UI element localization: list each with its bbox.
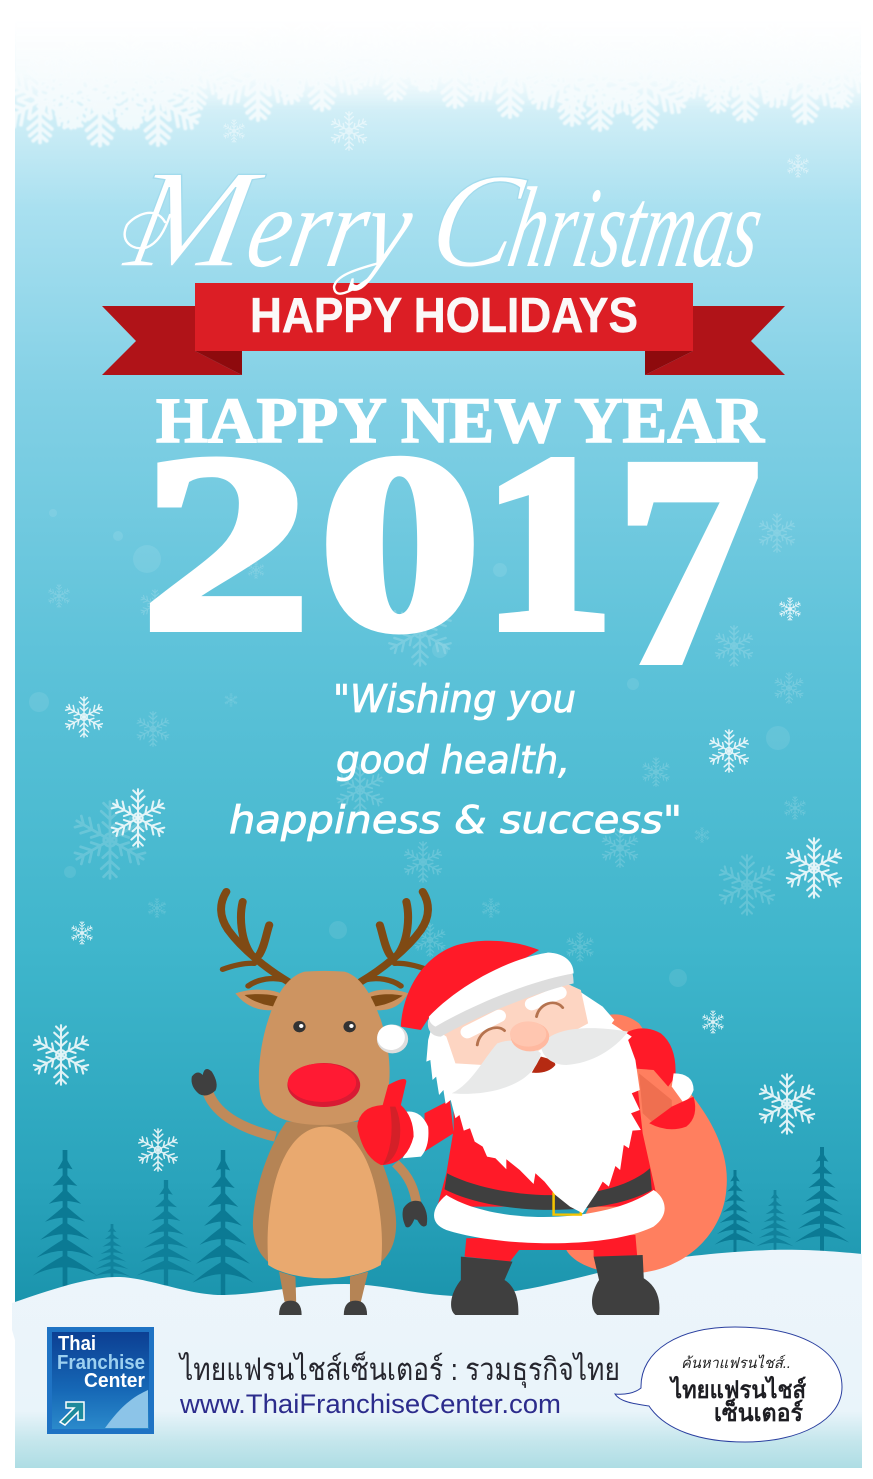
title: Merry Christmas: C	[419, 147, 535, 296]
santa with sack	[357, 941, 727, 1315]
faint bokeh dots	[29, 509, 790, 987]
logo: Thai Franchise Center	[47, 1327, 154, 1434]
logo: Thai Franchise Center: Thai	[58, 1333, 96, 1355]
characters	[192, 892, 727, 1315]
speech bubble: เซ็นเตอร์	[714, 1398, 803, 1427]
title: Merry Christmas	[114, 141, 777, 297]
footer Thai title: ไทยแฟรนไชส์เซ็นเตอร์ : รวมธุรกิจไทย	[177, 1351, 620, 1389]
speech bubble	[615, 1327, 842, 1442]
reindeer	[192, 892, 428, 1315]
snow ground	[12, 1250, 862, 1468]
year 2017	[141, 396, 761, 726]
footer URL: www.ThaiFranchiseCenter.com	[179, 1389, 561, 1419]
pine trees	[33, 1147, 849, 1296]
bright snowflakes	[32, 112, 843, 1171]
heading: Happy New Year: HAPPY NEW YEAR	[156, 385, 765, 457]
speech bubble: ไทยแฟรนไชส์	[668, 1375, 806, 1404]
year 2017: 2	[141, 403, 311, 683]
wishing message	[229, 677, 682, 842]
logo: Thai Franchise Center: Franchise	[57, 1352, 145, 1374]
speech bubble: ค้นหาแฟรนไชส์..	[681, 1354, 791, 1372]
wishing message: happiness & success"	[229, 798, 682, 842]
title: Merry Christmas: M	[114, 141, 274, 297]
title: Merry Christmas: erry	[238, 165, 423, 292]
icon: arrow	[60, 1402, 84, 1425]
year 2017: 0	[319, 403, 481, 683]
snow garland at top	[0, 17, 873, 145]
year 2017: 7	[615, 396, 761, 726]
wishing message: "Wishing you	[333, 677, 576, 721]
year 2017: 1	[482, 403, 614, 683]
faint snowflakes	[48, 514, 806, 961]
ribbon text: HAPPY HOLIDAYS	[250, 289, 638, 343]
wishing message: good health,	[336, 738, 570, 782]
logo: Thai Franchise Center: Center	[84, 1370, 145, 1392]
ribbon banner	[102, 283, 785, 375]
